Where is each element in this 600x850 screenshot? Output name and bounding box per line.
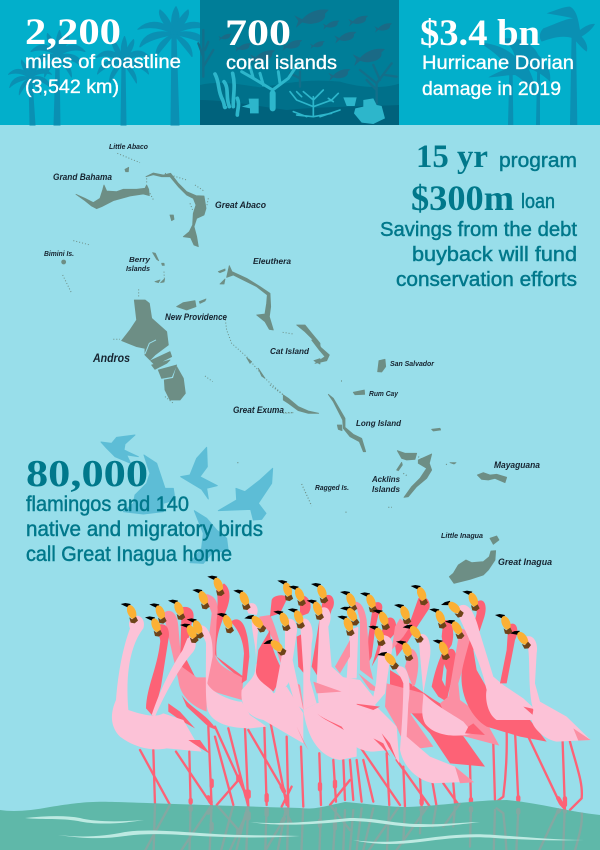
map labels: Grand Bahama	[53, 172, 112, 182]
island: Cat Island	[297, 325, 320, 351]
text: miles of coastline: miles of coastline	[25, 51, 181, 73]
callout: flamingos: native and migratory birds	[26, 518, 263, 541]
map labels: Little Inagua	[441, 531, 483, 540]
map labels: Mayaguana	[494, 460, 540, 470]
island: Little Inagua	[490, 536, 499, 544]
panel: coastline	[0, 0, 210, 125]
flamingo flock	[112, 576, 591, 783]
icon: palm trees left	[8, 7, 210, 125]
callout: program and loan: 15 yr	[416, 139, 488, 175]
island: Mayaguana	[477, 473, 507, 483]
birds silhouettes	[101, 435, 273, 563]
seascape illustration	[198, 10, 400, 125]
callout: program and loan	[380, 139, 577, 291]
island: Long Island	[328, 394, 366, 452]
map labels: Little Abaco	[109, 144, 149, 151]
map labels: New Providence	[165, 312, 227, 322]
icon: wind-blown palms	[480, 7, 595, 125]
island: Andros	[122, 300, 168, 360]
map labels	[44, 144, 552, 567]
centre flamingos	[231, 619, 249, 683]
map labels: Berry	[129, 255, 151, 264]
map labels: Acklins	[371, 474, 400, 484]
callout: program and loan: loan	[521, 191, 555, 213]
flamingos: right half	[330, 585, 591, 783]
map labels: Great Exuma	[233, 405, 284, 415]
panel: hurricane damage	[399, 0, 600, 125]
flamingos: left half	[112, 576, 357, 760]
light corals	[215, 63, 340, 117]
map labels: Islands	[372, 484, 400, 494]
text: 3,542 km: (3,542 km)	[25, 76, 119, 98]
stat: 2,200: 2,200	[25, 12, 121, 53]
water ripples	[25, 816, 584, 844]
map labels: San Salvador	[390, 359, 435, 368]
map labels: Great Abaco	[215, 200, 266, 210]
callout: flamingos: call Great Inagua home	[26, 543, 232, 566]
callout: program and loan: Savings from the debt	[380, 219, 577, 241]
front left flamingo	[112, 616, 202, 752]
callout: flamingos: 80,000	[26, 453, 148, 495]
flamingo legs	[140, 723, 582, 810]
text: damage in 2019: damage in 2019	[422, 78, 561, 100]
southeast islands	[237, 340, 507, 583]
callout: flamingos: flamingos and 140	[26, 493, 189, 516]
map: Bahamas islands	[62, 153, 507, 583]
back row	[212, 583, 243, 678]
stat: 700: 700	[225, 13, 291, 54]
text: Hurricane Dorian: Hurricane Dorian	[422, 52, 574, 74]
island: San Salvador	[378, 359, 386, 372]
island: Acklins	[397, 451, 417, 460]
map labels: Great Inagua	[498, 557, 552, 567]
panel: coral islands	[198, 0, 400, 125]
callout: flamingos	[26, 453, 263, 566]
map labels: Islands	[126, 264, 150, 273]
text: coral islands: coral islands	[226, 52, 337, 74]
callout: program and loan: conservation efforts	[396, 269, 577, 291]
dark branch corals	[198, 30, 397, 103]
map labels: Andros	[92, 351, 130, 365]
stat: 3.4 bn: $3.4 bn	[420, 13, 540, 54]
map labels: Bimini Is.	[44, 251, 74, 258]
callout: program and loan: program	[499, 150, 577, 172]
callout: program and loan: buyback will fund	[412, 244, 577, 266]
island: Great Exuma	[283, 395, 319, 413]
map labels: Rum Cay	[369, 389, 399, 398]
island: Great Inagua	[449, 551, 496, 583]
island: Grand Bahama	[76, 185, 149, 209]
island: Rum Cay	[353, 390, 365, 395]
map labels: Long Island	[356, 418, 402, 428]
island: New Providence	[177, 301, 196, 310]
island: Great Abaco	[146, 173, 206, 247]
leg reflections	[140, 800, 582, 850]
northwest islands	[62, 153, 320, 413]
water	[0, 800, 600, 850]
seabed	[200, 100, 400, 125]
map labels: Ragged Is.	[315, 485, 349, 492]
map labels: Cat Island	[270, 346, 310, 356]
callout: program and loan: $300m	[411, 178, 514, 218]
dark flamingo with looped neck	[432, 620, 456, 702]
map labels: Eleuthera	[253, 256, 291, 266]
island: Berry and Bimini	[153, 253, 159, 261]
island: Eleuthera	[227, 266, 273, 330]
